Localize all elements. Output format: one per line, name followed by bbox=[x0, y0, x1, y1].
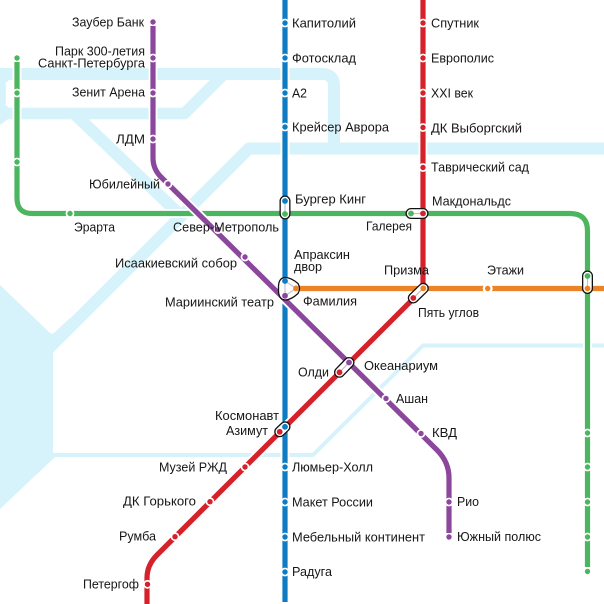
station labels: Исаакиевский собор bbox=[115, 256, 237, 270]
station labels: Космонавт bbox=[215, 408, 279, 423]
station labels: Эрарта bbox=[74, 220, 116, 234]
station labels: Макет России bbox=[292, 494, 373, 510]
water: rivers and gulf bbox=[0, 74, 604, 509]
transfer: Апраксин двор, Фамилия, Мариинский театр bbox=[278, 278, 300, 300]
station labels: Фотосклад bbox=[292, 50, 356, 66]
station labels: Парк 300-летия bbox=[55, 44, 145, 58]
station labels: КВД bbox=[432, 425, 457, 440]
station labels: Рио bbox=[457, 494, 479, 509]
station labels: Этажи bbox=[487, 262, 524, 278]
station labels: Галерея bbox=[366, 218, 412, 234]
station labels: Юбилейный bbox=[89, 176, 160, 192]
metro line: red bbox=[143, 0, 427, 604]
station labels: ДК Выборгский bbox=[431, 120, 522, 136]
transfer: right green and orange bbox=[585, 273, 590, 291]
station labels: Южный полюс bbox=[457, 529, 541, 544]
station labels: Мебельный континент bbox=[292, 530, 425, 544]
metro line: blue bbox=[281, 0, 289, 602]
station labels: XXI век bbox=[431, 86, 473, 100]
station labels: Заубер Банк bbox=[72, 14, 144, 30]
station labels: Люмьер-Холл bbox=[292, 460, 373, 474]
station labels: Макдональдс bbox=[432, 194, 511, 208]
station labels: Призма bbox=[384, 262, 430, 278]
station labels: Апраксин bbox=[294, 247, 350, 262]
station labels: Зенит Арена bbox=[72, 84, 146, 100]
purple line stations bbox=[149, 19, 453, 540]
station labels: Мариинский театр bbox=[165, 294, 274, 310]
transfer: Бургер Кинг bbox=[282, 198, 288, 217]
station labels: Олди bbox=[298, 364, 329, 380]
station labels: двор bbox=[294, 259, 322, 274]
station labels: Капитолий bbox=[292, 16, 356, 30]
transfer: Галерея bbox=[408, 211, 426, 216]
station labels: Румба bbox=[119, 528, 157, 544]
orange line station bbox=[483, 284, 493, 294]
station labels: Бургер Кинг bbox=[295, 192, 366, 206]
transfer: Призма and Пять углов bbox=[410, 285, 426, 301]
blue line stations bbox=[281, 19, 289, 576]
station labels bbox=[38, 14, 541, 592]
metro line: purple bbox=[149, 19, 453, 540]
station labels: Ашан bbox=[396, 391, 428, 406]
station labels: Радуга bbox=[292, 564, 333, 579]
station labels: Океанариум bbox=[364, 358, 438, 373]
station labels: Спутник bbox=[431, 16, 479, 30]
red line stations bbox=[143, 19, 427, 589]
station labels: Музей РЖД bbox=[159, 460, 227, 474]
station labels: Крейсер Аврора bbox=[292, 120, 390, 134]
metro line: orange bbox=[296, 284, 604, 294]
station labels: Пять углов bbox=[418, 305, 479, 320]
station labels: Европолис bbox=[431, 50, 494, 66]
transfer: Олди and Океанариум bbox=[337, 360, 352, 375]
station labels: Петергоф bbox=[83, 576, 139, 592]
transfer: Космонавт and Азимут bbox=[277, 424, 288, 435]
station labels: Фамилия bbox=[303, 294, 357, 308]
station labels: Север-Метрополь bbox=[173, 220, 279, 234]
station labels: ДК Горького bbox=[123, 494, 196, 508]
station labels: А2 bbox=[292, 86, 307, 100]
station labels: Санкт-Петербурга bbox=[38, 56, 146, 70]
station labels: Таврический сад bbox=[431, 160, 529, 174]
station labels: Азимут bbox=[226, 423, 268, 438]
station labels: ЛДМ bbox=[116, 132, 145, 146]
